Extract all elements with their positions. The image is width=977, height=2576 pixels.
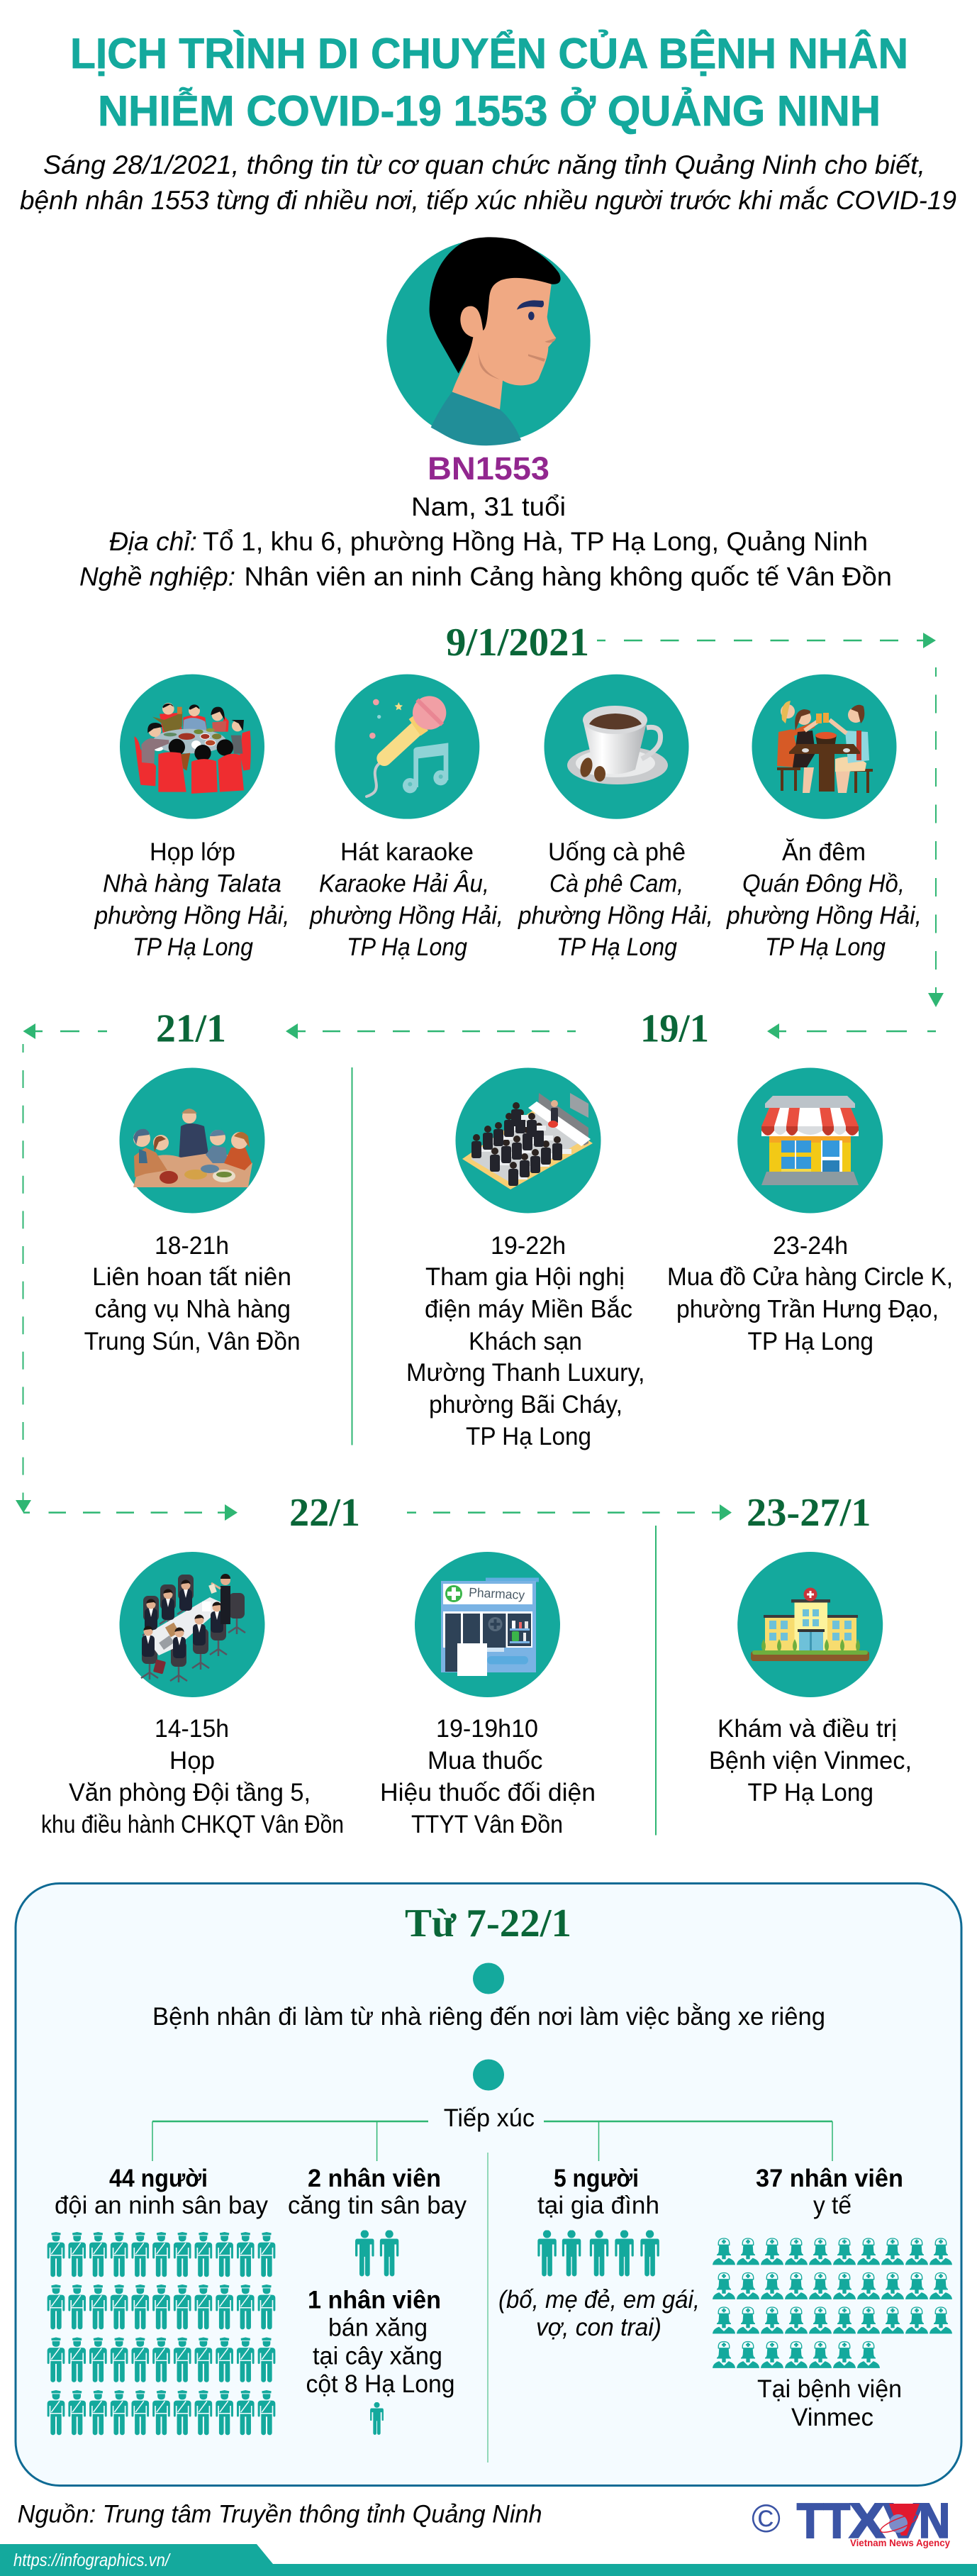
footer band with URL: https://infographics.vn/ (13, 2550, 172, 2570)
group: 44 airport security (48, 2165, 275, 2435)
text: activities on 9/1 (94, 838, 922, 961)
group: 37 medical staff: Vinmec (791, 2404, 873, 2431)
panel: from 7 to 22/1 (16, 1884, 961, 2485)
arrow: left side going down (16, 1044, 31, 1513)
text: 22/1 pharmacy: 19-19h10 (436, 1715, 538, 1743)
arrow: right side going down (928, 667, 944, 1007)
text: activities on 9/1: Quán Đông Hồ, (742, 870, 905, 898)
logo: copyright and TTXVN (752, 2494, 950, 2548)
icon: year-end party (119, 1068, 265, 1213)
group: 5 family members: (bố, mẹ đẻ, em gái, (498, 2286, 700, 2314)
text: activities on 9/1: TP Hạ Long (765, 933, 886, 961)
text: 21/1 party: 18-21h (155, 1232, 229, 1260)
icon: pharmacy: Pharmacy (469, 1585, 525, 1602)
text: 23-27/1 treatment: Bệnh viện Vinmec, (709, 1747, 912, 1775)
icon: coffee cup (545, 674, 689, 819)
icon: patient portrait (386, 237, 591, 445)
group: 5 family members: 5 người (554, 2165, 639, 2192)
patient info: Nhân viên an ninh Cảng hàng không quốc tế Vân Đồn (244, 562, 892, 592)
arrow: left edge to 22/1 (23, 1504, 238, 1521)
icon: class reunion dinner (120, 674, 264, 819)
arrow: 22/1 to 23-27/1 (407, 1504, 732, 1521)
icon: hospital (737, 1552, 883, 1697)
text: activities on 9/1: Họp lớp (150, 838, 235, 866)
text: 19/1 conference: Khách sạn (469, 1328, 582, 1355)
title: NHIỄM COVID-19 1553 Ở QUẢNG NINH (98, 87, 881, 135)
group: 5 family members: vợ, con trai) (536, 2314, 661, 2341)
icon: late-night meal (752, 674, 896, 819)
panel heading: Từ 7-22/1 (405, 1902, 571, 1945)
patient info (79, 450, 892, 592)
text: activities on 9/1: Cà phê Cam, (549, 870, 683, 898)
arrow: right to 19/1 (767, 1023, 936, 1039)
text: 22/1 meeting: Họp (169, 1747, 215, 1775)
text: 19/1 conference (406, 1232, 645, 1450)
divider: 22/1 and 23-27/1 (655, 1526, 657, 1836)
text: activities on 9/1: Ăn đêm (782, 838, 866, 866)
group: 5 family members (498, 2165, 700, 2341)
text: 22/1 meeting: Văn phòng Đội tầng 5, (69, 1779, 311, 1806)
text: 21/1 party: cảng vụ Nhà hàng (95, 1295, 291, 1323)
logo: copyright and TTXVN: TT (797, 2494, 850, 2548)
logo: copyright and TTXVN: X (849, 2494, 885, 2548)
contact label: Tiếp xúc (444, 2104, 535, 2132)
group: 37 medical staff (713, 2165, 952, 2431)
source note: Nguồn: Trung tâm Truyền thông tỉnh Quảng Ninh (18, 2500, 542, 2528)
group: 1 gas station staff: tại cây xăng (313, 2342, 442, 2370)
icon: pharmacy (415, 1552, 560, 1697)
text: 22/1 pharmacy (380, 1715, 596, 1838)
group: 37 medical staff: Tại bệnh viện (757, 2375, 902, 2403)
text: activities on 9/1: phường Hồng Hải, (726, 902, 922, 929)
text: 23-27/1 treatment: Khám và điều trị (718, 1715, 897, 1743)
text: 19/1 store: 23-24h (773, 1232, 848, 1260)
text: activities on 9/1: Uống cà phê (548, 838, 686, 866)
text: 23-27/1 treatment: TP Hạ Long (747, 1779, 873, 1806)
group: 1 gas station staff: bán xăng (328, 2314, 428, 2341)
text: 19/1 store: TP Hạ Long (747, 1328, 873, 1355)
text: activities on 9/1: phường Hồng Hải, (309, 902, 503, 929)
group: 44 airport security: đội an ninh sân bay (55, 2192, 268, 2219)
text: activities on 9/1: TP Hạ Long (557, 933, 677, 961)
text: 22/1 meeting (41, 1715, 344, 1838)
text: 23-27/1 treatment (709, 1715, 912, 1806)
patient info: Địa chỉ: (109, 526, 197, 556)
text: 19/1 conference: Tham gia Hội nghị (425, 1263, 625, 1291)
text: 22/1 pharmacy: Mua thuốc (428, 1747, 542, 1775)
patient info: Tổ 1, khu 6, phường Hồng Hà, TP Hạ Long, Quảng Ninh (203, 526, 868, 556)
group: 1 gas station staff: cột 8 Hạ Long (306, 2370, 455, 2398)
patient info: BN1553 (428, 450, 549, 487)
text: 19/1 store: phường Trần Hưng Đạo, (676, 1295, 939, 1323)
heading: 22/1: 22/1 (289, 1491, 360, 1535)
text: 22/1 meeting: 14-15h (155, 1715, 229, 1743)
text: activities on 9/1: phường Hồng Hải, (94, 902, 289, 929)
subtitle: Sáng 28/1/2021, thông tin từ cơ quan chức năng tỉnh Quảng Ninh cho biết, (43, 150, 925, 179)
icon: conference hall (455, 1068, 601, 1213)
text: activities on 9/1: Hát karaoke (340, 838, 474, 866)
group: 5 family members: tại gia đình (537, 2192, 659, 2219)
contact tree lines (152, 2121, 832, 2463)
group: 1 gas station staff: 1 nhân viên (308, 2286, 441, 2314)
text: 22/1 pharmacy: TTYT Vân Đồn (411, 1811, 563, 1838)
text: activities on 9/1: TP Hạ Long (133, 933, 253, 961)
text: activities on 9/1: phường Hồng Hải, (518, 902, 713, 929)
heading: 19/1: 19/1 (640, 1007, 709, 1051)
title: LỊCH TRÌNH DI CHUYỂN CỦA BỆNH NHÂN (70, 30, 908, 77)
arrow: 21/1 to left edge (23, 1023, 107, 1039)
text: 19/1 store: Mua đồ Cửa hàng Circle K, (667, 1263, 953, 1291)
group: 37 medical staff: 37 nhân viên (756, 2165, 903, 2192)
arrow: 19/1 to 21/1 (286, 1023, 576, 1039)
footer band with URL (0, 2544, 977, 2576)
group: 2 canteen staff: căng tin sân bay (288, 2192, 467, 2219)
timeline dot 2 (473, 2060, 504, 2091)
heading: 23-27/1: 23-27/1 (747, 1491, 871, 1535)
logo: copyright and TTXVN: © (752, 2496, 781, 2541)
patient info: Nghề nghiệp: (79, 562, 235, 592)
text: 22/1 meeting: khu điều hành CHKQT Vân Đồn (41, 1811, 344, 1838)
icon: office meeting (119, 1552, 265, 1697)
logo: copyright and TTXVN: Vietnam News Agency (850, 2538, 950, 2548)
text: 21/1 party: Liên hoan tất niên (92, 1263, 291, 1291)
heading: 9/1/2021: 9/1/2021 (446, 621, 589, 665)
text: 22/1 pharmacy: Hiệu thuốc đối diện (380, 1779, 596, 1806)
heading: 21/1: 21/1 (156, 1007, 226, 1051)
subtitle (20, 150, 956, 215)
divider: 21/1 and 19/1 (352, 1067, 353, 1445)
text: 19/1 store (667, 1232, 953, 1355)
timeline dot 1 (473, 1963, 504, 1994)
icon: convenience store (737, 1068, 883, 1213)
group: 2 canteen staff: 2 nhân viên (308, 2165, 441, 2192)
text: activities on 9/1: TP Hạ Long (347, 933, 467, 961)
group: 37 medical staff: y tế (813, 2192, 852, 2219)
text: activities on 9/1: Karaoke Hải Âu, (319, 870, 489, 898)
text: 19/1 conference: TP Hạ Long (466, 1423, 591, 1450)
commuting note: Bệnh nhân đi làm từ nhà riêng đến nơi làm việc bằng xe riêng (152, 2003, 825, 2031)
text: 21/1 party (84, 1232, 301, 1355)
logo: copyright and TTXVN: V (883, 2494, 923, 2548)
text: 19/1 conference: 19-22h (491, 1232, 566, 1260)
text: 19/1 conference: điện máy Miền Bắc (425, 1295, 632, 1323)
title (70, 30, 908, 135)
text: 21/1 party: Trung Sún, Vân Đồn (84, 1328, 301, 1355)
arrow: 9/1 to right (597, 633, 936, 648)
group: 44 airport security: 44 người (109, 2165, 208, 2192)
subtitle: bệnh nhân 1553 từng đi nhiều nơi, tiếp xúc nhiều người trước khi mắc COVID-19 (20, 185, 956, 215)
group: 1 gas station staff (306, 2286, 455, 2435)
icon: karaoke microphone (335, 674, 479, 819)
logo: copyright and TTXVN: N (919, 2494, 950, 2548)
text: 19/1 conference: Mường Thanh Luxury, (406, 1359, 645, 1387)
text: activities on 9/1: Nhà hàng Talata (103, 870, 281, 898)
group: 2 canteen staff (288, 2165, 467, 2277)
patient info: Nam, 31 tuổi (411, 492, 566, 521)
text: 19/1 conference: phường Bãi Cháy, (429, 1391, 623, 1419)
